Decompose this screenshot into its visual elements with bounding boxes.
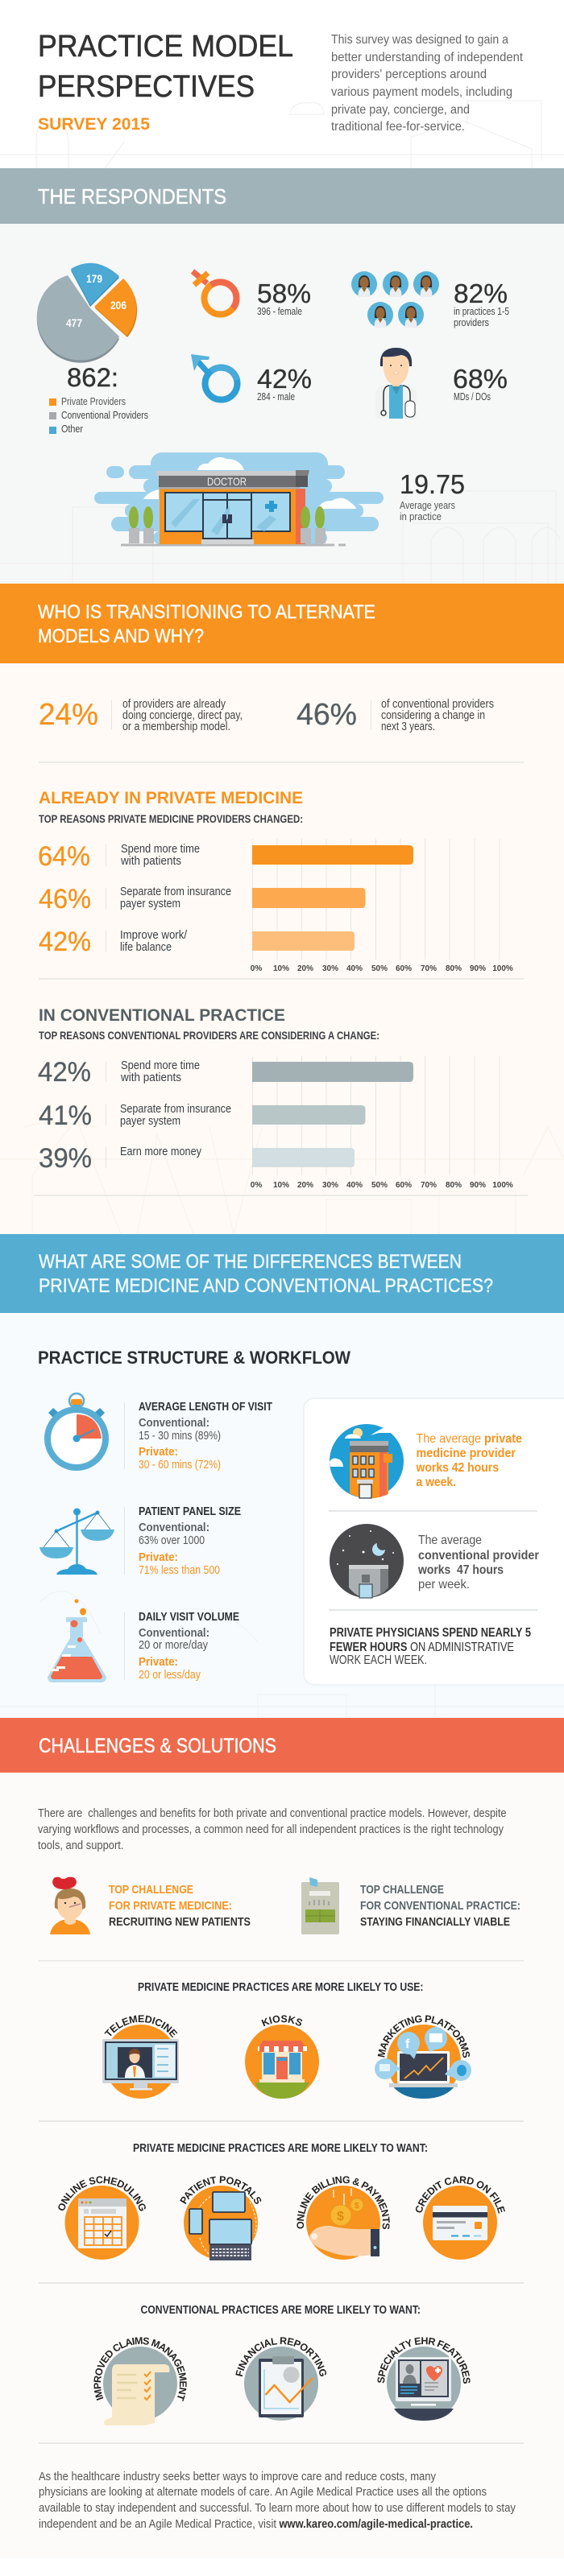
icon: online billing and payments: $ [355, 2202, 359, 2211]
heading: conventional more likely to want: CONVENTIONAL PRACTICES ARE MORE LIKELY TO WANT: [140, 2304, 421, 2317]
stat: 46% considering change [297, 697, 494, 733]
icon: online scheduling: ONLINE SCHEDULING [58, 2176, 146, 2211]
icon: online scheduling [58, 2176, 146, 2260]
bar chart: private medicine reasons: 0% [251, 964, 262, 973]
text: patient panel size: 71% less than 500 [139, 1564, 220, 1577]
stat: 24% already in alternate models: of providers are already [122, 697, 226, 711]
intro text: providers' perceptions around [331, 68, 487, 81]
section band: who is transitioning [0, 584, 564, 663]
pie chart: respondents by type: 206 [110, 299, 126, 312]
stat: 46% considering change: 46% [297, 698, 357, 732]
panel: working hours [304, 1398, 564, 1685]
icon: balance scale [39, 1509, 114, 1575]
text: patient panel size: Private: [139, 1551, 178, 1564]
icon: conventional practice building at night [330, 1524, 404, 1598]
bar chart: conventional practice reasons: 40% [346, 1181, 363, 1190]
icon: stopwatch [48, 1393, 106, 1468]
text: patient panel size: Conventional: [139, 1521, 209, 1534]
bar chart: private medicine reasons: 100% [492, 964, 513, 973]
stat: 68% MDs: MDs / DOs [454, 391, 491, 402]
title: PRACTICE MODEL [38, 30, 293, 64]
section band: the respondents [0, 168, 564, 224]
text: top challenge for private medicine: FOR PRIVATE MEDICINE: [109, 1899, 232, 1913]
bar chart: private medicine reasons: 20% [297, 964, 313, 973]
bar chart: conventional practice reasons: 0% [251, 1181, 262, 1190]
text: private provider hours: a week. [416, 1476, 456, 1489]
icon: telemedicine [102, 2015, 179, 2099]
bar chart: conventional practice reasons: 10% [273, 1181, 289, 1190]
pie chart: respondents by type: 477 [66, 316, 82, 329]
text: conventional provider hours: per week. [418, 1578, 470, 1591]
reasons list: conventional practice: Earn more money [120, 1145, 201, 1158]
reasons list: conventional practice: 41% [39, 1100, 92, 1131]
reasons list: private medicine: Spend more time [121, 842, 200, 856]
text: challenges intro: tools, and support. [38, 1839, 124, 1852]
text: administrative hours callout: WORK EACH WEEK. [330, 1653, 427, 1667]
stat: 19.75 years in practice [400, 469, 465, 522]
text: patient panel size: PATIENT PANEL SIZE [139, 1505, 241, 1518]
illustration: doctor office storefront: DOCTOR [207, 475, 247, 488]
icon: online billing and payments [297, 2176, 390, 2260]
reasons list: private medicine: payer system [120, 897, 180, 910]
text: conventional provider hours: The average [418, 1534, 482, 1547]
heading: private more likely to want: PRIVATE MEDICINE PRACTICES ARE MORE LIKELY TO WANT: [133, 2142, 428, 2155]
text: administrative hours callout: FEWER HOURS ON ADMINISTRATIVE [330, 1641, 514, 1654]
intro text: various payment models, including [331, 85, 512, 99]
title [38, 30, 293, 104]
text: top challenge for private medicine: RECRUITING NEW PATIENTS [109, 1915, 251, 1929]
icon: lab flask [48, 1599, 106, 1682]
stat: 24% already in alternate models: or a membership model. [122, 720, 230, 733]
bar chart: conventional practice reasons: 60% [396, 1181, 412, 1190]
icon: patient portals: PATIENT PORTALS [180, 2176, 261, 2204]
text: average length of visit [139, 1401, 272, 1472]
title: PERSPECTIVES [38, 70, 255, 104]
text: conventional provider hours: conventional provider [418, 1549, 539, 1563]
icon: online billing and payments: $ [337, 2210, 344, 2223]
intro text: better understanding of independent [331, 51, 524, 64]
reasons list: private medicine: Improve work/ [120, 928, 188, 942]
reasons list: private medicine [38, 841, 231, 957]
reasons list: conventional practice: Separate from insurance [120, 1102, 231, 1116]
section band: differences: WHAT ARE SOME OF THE DIFFERENCES BETWEEN [39, 1251, 462, 1273]
reasons list: conventional practice: payer system [120, 1114, 180, 1128]
text: conventional provider hours: works 47 hours [417, 1563, 504, 1577]
stat: 24% already in alternate models: 24% [39, 698, 98, 732]
text: average length of visit: 15 - 30 mins (89%) [139, 1430, 221, 1443]
text: top challenge for conventional practice [360, 1883, 520, 1929]
bar chart: conventional practice reasons: 20% [297, 1181, 313, 1190]
text: closing paragraph: As the healthcare industry seeks better ways to improve care and reduce costs, many [39, 2470, 436, 2483]
stat: 19.75 years in practice: in practice [400, 510, 442, 522]
bar chart: private medicine reasons: 90% [470, 964, 486, 973]
bar chart: private medicine reasons: 80% [446, 964, 462, 973]
icon: private practice building in blue circle [330, 1424, 404, 1498]
icon: kiosks: KIOSKS [261, 2015, 303, 2027]
icon: specialty EHR features: SPECIALTY EHR FEATURES [377, 2337, 471, 2384]
text: private provider hours: medicine provider [416, 1447, 516, 1460]
stat: 19.75 years in practice: Average years [400, 499, 455, 511]
bar chart: private medicine reasons: 40% [346, 964, 363, 973]
text: daily visit volume: DAILY VISIT VOLUME [139, 1611, 239, 1624]
text: average length of visit: AVERAGE LENGTH OF VISIT [139, 1401, 272, 1414]
stat: 24% already in alternate models: doing concierge, direct pay, [122, 708, 243, 722]
stat: 46% considering change: considering a change in [381, 708, 485, 722]
stat: 82% small practices [454, 279, 509, 328]
reasons list: conventional practice: with patients [120, 1071, 181, 1084]
reasons list: private medicine: Separate from insurance [120, 885, 231, 898]
icon: specialty EHR features [377, 2337, 471, 2421]
heading: more likely to use: PRIVATE MEDICINE PRACTICES ARE MORE LIKELY TO USE: [138, 1981, 424, 1994]
subtitle: SURVEY 2015 [38, 115, 150, 134]
stat: 58% female: 396 - female [257, 306, 302, 317]
section band: challenges and solutions: CHALLENGES & SOLUTIONS [39, 1735, 276, 1757]
total respondents: 862: [67, 363, 118, 392]
text: daily visit volume: 20 or more/day [139, 1639, 209, 1652]
reasons list: conventional practice [38, 1057, 231, 1174]
icon: group of five physicians [351, 271, 439, 328]
reasons list: conventional practice: 42% [38, 1057, 91, 1088]
text: closing paragraph: www.kareo.com/agile-medical-practice. [279, 2517, 473, 2531]
section band: challenges and solutions [0, 1718, 564, 1773]
icon: doctor [375, 348, 417, 419]
text: patient panel size: 63% over 1000 [139, 1534, 205, 1547]
stat: 82% small practices: 82% [454, 279, 508, 308]
stat: 46% considering change: next 3 years. [381, 720, 435, 733]
bar chart: private medicine reasons: 10% [273, 964, 289, 973]
stat: 46% considering change: of conventional providers [381, 697, 494, 711]
section band: who is transitioning: MODELS AND WHY? [38, 625, 204, 647]
icon: female symbol [193, 271, 237, 314]
text: private provider hours: works 42 hours [416, 1461, 499, 1475]
text: administrative hours callout [330, 1626, 531, 1667]
pie legend: Conventional Providers [61, 410, 148, 421]
stat: 68% MDs: 68% [453, 364, 508, 394]
icon: sick patient [50, 1877, 90, 1934]
icon: marketing platforms: f [405, 2037, 410, 2051]
pie legend [49, 396, 148, 435]
section band: the respondents: THE RESPONDENTS [38, 184, 226, 208]
bar chart: conventional practice reasons: 50% [371, 1181, 388, 1190]
bar chart: private medicine reasons: 70% [421, 964, 437, 973]
bar chart: conventional practice reasons [251, 1056, 513, 1190]
reasons list: private medicine: life balance [120, 940, 172, 954]
text: daily visit volume: Private: [139, 1656, 178, 1669]
bar chart: conventional practice reasons: 80% [446, 1181, 462, 1190]
pie legend: Other [61, 423, 83, 435]
icon: patient portals [180, 2176, 261, 2260]
pie chart: respondents by type: 179 [86, 272, 102, 285]
pie legend: Private Providers [61, 396, 126, 407]
stat: 58% female: 58% [257, 279, 311, 308]
bar chart: private medicine reasons [251, 839, 513, 973]
icon: marketing platforms [375, 2015, 471, 2099]
icon: marketing platforms: MARKETING PLATFORMS [377, 2015, 471, 2058]
intro text: private pay, concierge, and [331, 103, 470, 117]
reasons list: private medicine: 64% [38, 841, 90, 872]
text: private provider hours: The average private [416, 1432, 522, 1446]
reasons list: private medicine: 42% [39, 927, 91, 957]
reasons list: private medicine: 46% [39, 884, 91, 914]
text: daily visit volume: 20 or less/day [139, 1669, 201, 1682]
section band: differences [0, 1234, 564, 1313]
section band: who is transitioning: WHO IS TRANSITIONING TO ALTERNATE [38, 601, 375, 623]
bar chart: conventional practice reasons: 90% [470, 1181, 486, 1190]
text: average length of visit: 30 - 60 mins (72%) [139, 1459, 221, 1472]
stat: 42% male: 42% [257, 364, 312, 394]
text: challenges intro [38, 1806, 506, 1852]
bar chart: private medicine reasons: 30% [322, 964, 338, 973]
reasons list: conventional practice: 39% [39, 1143, 92, 1174]
heading: practice structure and workflow: PRACTICE STRUCTURE & WORKFLOW [38, 1348, 350, 1368]
bar chart: conventional practice reasons: 100% [492, 1181, 513, 1190]
text: closing paragraph [39, 2470, 516, 2531]
intro text: This survey was designed to gain a [331, 33, 508, 47]
intro text [331, 33, 524, 134]
stat: 82% small practices: in practices 1-5 [454, 306, 509, 317]
icon: credit card on file: CREDIT CARD ON FILE [416, 2176, 505, 2214]
icon: financial reporting: FINANCIAL REPORTING [235, 2337, 326, 2376]
bar chart: private medicine reasons: 50% [371, 964, 388, 973]
text: top challenge for conventional practice: STAYING FINANCIALLY VIABLE [360, 1915, 510, 1929]
text: top challenge for conventional practice: FOR CONVENTIONAL PRACTICE: [360, 1899, 520, 1913]
text: top challenge for private medicine [109, 1883, 251, 1929]
text: top challenge for private medicine: TOP CHALLENGE [109, 1883, 193, 1897]
section band: differences: PRIVATE MEDICINE AND CONVENTIONAL PRACTICES? [39, 1275, 493, 1297]
intro text: traditional fee-for-service. [331, 120, 465, 134]
icon: improved claims management: IMPROVED CLAIMS MANAGEMENT [93, 2337, 187, 2401]
text: top challenge for conventional practice: TOP CHALLENGE [360, 1883, 444, 1897]
bar chart: conventional practice reasons: 70% [421, 1181, 437, 1190]
heading: already in private medicine: ALREADY IN PRIVATE MEDICINE [39, 789, 303, 807]
heading: in conventional practice: IN CONVENTIONAL PRACTICE [39, 1006, 285, 1025]
illustration: doctor office storefront [94, 452, 384, 546]
stat: 82% small practices: providers [454, 317, 489, 328]
heading: already in private medicine [39, 789, 303, 825]
text: daily visit volume: Conventional: [139, 1627, 209, 1640]
icon: financial reporting [235, 2337, 326, 2421]
text: average length of visit: Private: [139, 1446, 178, 1459]
icon: kiosks [245, 2015, 319, 2099]
stat: 42% male: 284 - male [257, 391, 295, 402]
icon: bill with cash [301, 1877, 339, 1934]
stat: 24% already in alternate models [39, 697, 243, 733]
icon: male symbol [191, 354, 237, 399]
text: conventional provider hours [417, 1534, 539, 1591]
heading: in conventional practice: TOP REASONS CONVENTIONAL PROVIDERS ARE CONSIDERING A CHANGE: [39, 1029, 379, 1042]
text: patient panel size [139, 1505, 241, 1577]
text: closing paragraph: physicians are looking at alternate models of care. An Agile Medical Practice uses all the options [39, 2485, 487, 2499]
icon: credit card on file [416, 2176, 505, 2260]
bar chart: private medicine reasons: 60% [396, 964, 412, 973]
icon: online billing and payments: ONLINE BILLING & PAYMENTS [297, 2176, 390, 2230]
pie chart: respondents by type [37, 263, 137, 363]
heading: already in private medicine: TOP REASONS PRIVATE MEDICINE PROVIDERS CHANGED: [39, 812, 303, 825]
icon: telemedicine: TELEMEDICINE [104, 2015, 177, 2038]
text: closing paragraph: independent and be an Agile Medical Practice, visit [39, 2517, 277, 2531]
bar chart: conventional practice reasons: 30% [322, 1181, 338, 1190]
text: average length of visit: Conventional: [139, 1417, 209, 1430]
text: private provider hours [416, 1432, 522, 1489]
text: daily visit volume [139, 1611, 239, 1682]
reasons list: conventional practice: Spend more time [121, 1059, 200, 1072]
heading: in conventional practice [39, 1006, 379, 1042]
stat: 19.75 years in practice: 19.75 [400, 469, 465, 499]
reasons list: private medicine: with patients [120, 854, 181, 868]
